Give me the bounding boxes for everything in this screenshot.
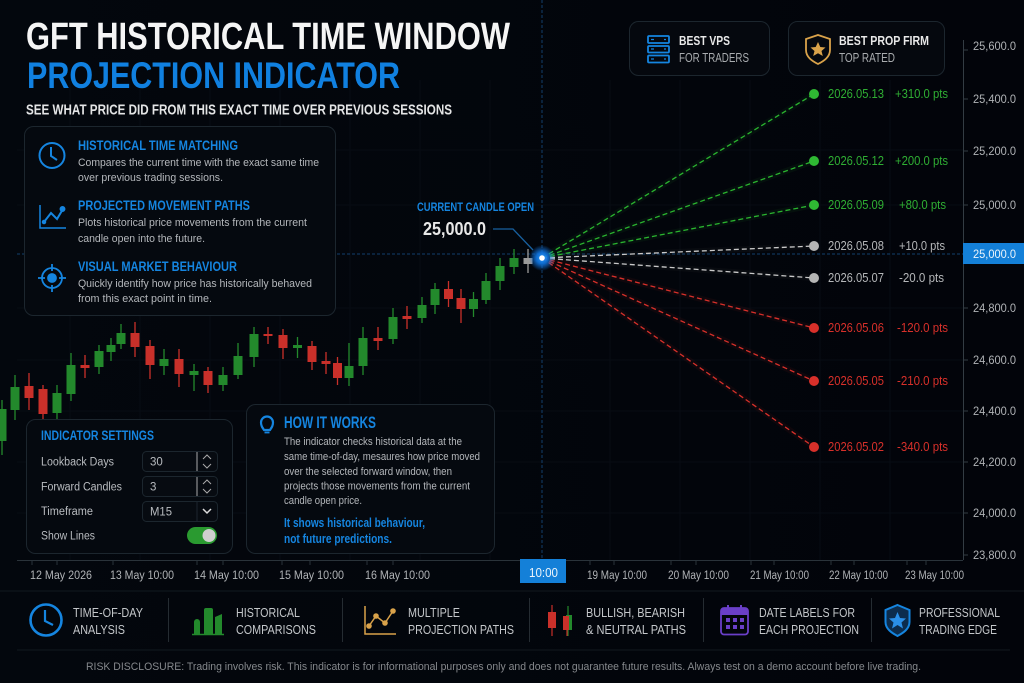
feature: time-of-day analysis: ANALYSIS xyxy=(73,622,125,637)
feature: date labels: DATE LABELS FOR xyxy=(759,605,855,620)
x axis: 12 May 2026 xyxy=(30,570,92,582)
feature: visual market behaviour xyxy=(78,259,312,305)
feature: multiple projection paths: PROJECTION PATHS xyxy=(408,622,514,637)
setting: forward candles: Forward Candles xyxy=(41,482,122,494)
setting: timeframe xyxy=(41,502,218,522)
x axis: 20 May 10:00 xyxy=(668,570,729,582)
feature: date labels: EACH PROJECTION xyxy=(759,622,859,637)
subtitle: SEE WHAT PRICE DID FROM THIS EXACT TIME OVER PREVIOUS SESSIONS xyxy=(26,102,452,118)
setting: lookback days: 30 xyxy=(150,456,163,468)
feature: historical comparisons: COMPARISONS xyxy=(236,622,316,637)
feature: projected movement paths: Plots historical price movements from the current xyxy=(78,217,307,229)
label 2026.05.13: +310.0 pts xyxy=(895,87,948,101)
bearish paths xyxy=(542,258,814,447)
current candle marker xyxy=(529,245,555,271)
label 2026.05.12: 2026.05.12 xyxy=(828,154,884,168)
feature: bullish, bearish and neutral paths: & NEUTRAL PATHS xyxy=(586,622,686,637)
feature: time-of-day analysis xyxy=(30,604,143,637)
icon: server xyxy=(648,36,669,62)
projection paths xyxy=(542,94,814,447)
y axis xyxy=(963,40,1024,562)
current time tag: 10:00 xyxy=(529,566,558,580)
feature: historical time matching: HISTORICAL TIME MATCHING xyxy=(78,138,238,153)
how it works note xyxy=(284,516,425,546)
callout: current candle open: CURRENT CANDLE OPEN xyxy=(417,200,534,214)
panel: indicator settings xyxy=(26,420,232,554)
label 2026.05.08: +10.0 pts xyxy=(899,239,945,253)
label 2026.05.13 xyxy=(809,87,948,101)
top badge: best vps xyxy=(630,22,770,76)
icon: gold shield xyxy=(806,35,830,64)
feature: professional trading edge xyxy=(886,605,1000,637)
x axis: 23 May 10:00 xyxy=(905,570,964,582)
setting: lookback days xyxy=(41,452,218,472)
y axis: 23,800.0 xyxy=(973,550,1016,562)
settings heading: INDICATOR SETTINGS xyxy=(41,428,154,443)
x axis: 14 May 10:00 xyxy=(194,570,259,582)
label 2026.05.02: -340.0 pts xyxy=(897,440,948,454)
y axis: 25,400.0 xyxy=(973,94,1016,106)
feature: professional trading edge: PROFESSIONAL xyxy=(919,605,1000,620)
y axis: 25,200.0 xyxy=(973,146,1016,158)
label 2026.05.09: +80.0 pts xyxy=(899,198,946,212)
label 2026.05.05: -210.0 pts xyxy=(897,374,948,388)
label 2026.05.02 xyxy=(809,440,948,454)
feature: visual market behaviour: VISUAL MARKET BEHAVIOUR xyxy=(78,259,237,274)
y axis: 24,400.0 xyxy=(973,406,1016,418)
icon: light bulb xyxy=(261,417,273,432)
feature: historical time matching: Compares the current time with the exact same time xyxy=(78,157,319,169)
feature: bullish, bearish and neutral paths: BULLISH, BEARISH xyxy=(586,605,685,620)
path glows xyxy=(542,94,814,447)
setting: forward candles: 3 xyxy=(150,482,156,494)
neutral paths xyxy=(542,246,814,278)
panel: how it works xyxy=(246,404,494,554)
label 2026.05.08: 2026.05.08 xyxy=(828,239,884,253)
title: PROJECTION INDICATOR xyxy=(27,54,400,96)
callout: current candle open xyxy=(417,200,534,250)
feature: multiple projection paths xyxy=(365,605,514,637)
setting: forward candles xyxy=(41,476,218,496)
setting: timeframe: M15 xyxy=(150,506,172,518)
label 2026.05.12: +200.0 pts xyxy=(895,154,948,168)
how it works body: candle open price. xyxy=(284,495,362,507)
setting: show lines toggle: Show Lines xyxy=(41,530,95,542)
feature: projected movement paths: PROJECTED MOVEMENT PATHS xyxy=(78,198,250,213)
feature: multiple projection paths: MULTIPLE xyxy=(408,605,460,620)
how it works note: not future predictions. xyxy=(284,532,392,546)
label 2026.05.05 xyxy=(809,374,948,388)
feature: bullish, bearish and neutral paths xyxy=(552,605,686,637)
y axis: 24,000.0 xyxy=(973,508,1016,520)
y axis: 24,200.0 xyxy=(973,457,1016,469)
feature: historical time matching: over previous trading sessions. xyxy=(78,172,223,184)
x axis: 13 May 10:00 xyxy=(110,570,174,582)
y axis: 24,600.0 xyxy=(973,355,1016,367)
label 2026.05.07 xyxy=(809,271,944,285)
how it works body xyxy=(284,436,480,507)
bullish paths xyxy=(542,94,814,258)
top badge: best vps: BEST VPS xyxy=(679,33,730,48)
label 2026.05.06: 2026.05.06 xyxy=(828,321,884,335)
how it works body: The indicator checks historical data at the xyxy=(284,436,462,448)
current time tag xyxy=(520,559,566,583)
label 2026.05.05: 2026.05.05 xyxy=(828,374,884,388)
top badge: best vps: FOR TRADERS xyxy=(679,50,749,65)
risk disclosure: RISK DISCLOSURE: Trading involves risk. This indicator is for informational purposes only and does not guarantee future results. Always test on a demo account before live trading. xyxy=(86,661,921,673)
how it works body: over the selected forward window, then xyxy=(284,466,452,478)
icon: target xyxy=(38,264,66,292)
feature: time-of-day analysis: TIME-OF-DAY xyxy=(73,605,143,620)
feature: professional trading edge: TRADING EDGE xyxy=(919,622,997,637)
feature: projected movement paths: candle open into the future. xyxy=(78,233,205,245)
label 2026.05.02: 2026.05.02 xyxy=(828,440,884,454)
title xyxy=(26,16,510,96)
current price tag xyxy=(963,243,1024,264)
label 2026.05.09: 2026.05.09 xyxy=(828,198,884,212)
label 2026.05.09 xyxy=(809,198,946,212)
candlestick chart xyxy=(2,249,528,455)
x axis: 16 May 10:00 xyxy=(365,570,430,582)
feature: historical comparisons xyxy=(192,605,316,637)
label 2026.05.08 xyxy=(809,239,945,253)
feature: historical comparisons: HISTORICAL xyxy=(236,605,300,620)
label 2026.05.06 xyxy=(809,321,948,335)
setting: lookback days: Lookback Days xyxy=(41,456,114,468)
x axis: 15 May 10:00 xyxy=(279,570,344,582)
top badge: best prop firm xyxy=(788,22,944,76)
label 2026.05.13: 2026.05.13 xyxy=(828,87,884,101)
how it works body: projects those movements from the current xyxy=(284,480,470,492)
icon: clock xyxy=(40,143,64,168)
title: GFT HISTORICAL TIME WINDOW xyxy=(26,16,510,58)
y axis: 25,000.0 xyxy=(973,200,1016,212)
label 2026.05.12 xyxy=(809,154,948,168)
x axis: 19 May 10:00 xyxy=(587,570,647,582)
label 2026.05.07: 2026.05.07 xyxy=(828,271,884,285)
current price tag: 25,000.0 xyxy=(973,247,1016,261)
feature: projected movement paths xyxy=(78,198,307,245)
setting: show lines toggle xyxy=(41,527,217,544)
setting: timeframe: Timeframe xyxy=(41,506,93,518)
end labels xyxy=(809,87,948,454)
how it works heading: HOW IT WORKS xyxy=(284,414,376,432)
x axis: 21 May 10:00 xyxy=(750,570,809,582)
icon: line chart xyxy=(40,205,66,228)
x axis xyxy=(17,559,964,583)
feature: visual market behaviour: Quickly identify how price has historically behaved xyxy=(78,278,312,290)
feature: date labels xyxy=(721,605,859,637)
feature strip xyxy=(30,604,1000,637)
crosshair lines xyxy=(17,0,963,560)
callout: current candle open: 25,000.0 xyxy=(423,219,486,239)
feature: historical time matching xyxy=(78,138,319,184)
top badge: best prop firm: BEST PROP FIRM xyxy=(839,33,929,48)
how it works note: It shows historical behaviour, xyxy=(284,516,425,530)
feature: visual market behaviour: from this exact point in time. xyxy=(78,293,212,305)
x axis: 22 May 10:00 xyxy=(829,570,888,582)
y axis: 24,800.0 xyxy=(973,303,1016,315)
label 2026.05.07: -20.0 pts xyxy=(899,271,944,285)
panel: features xyxy=(24,126,336,316)
y axis: 25,600.0 xyxy=(973,41,1016,53)
how it works body: same time-of-day, mesaures how price moved xyxy=(284,451,480,463)
label 2026.05.06: -120.0 pts xyxy=(897,321,948,335)
top badge: best prop firm: TOP RATED xyxy=(839,50,895,65)
